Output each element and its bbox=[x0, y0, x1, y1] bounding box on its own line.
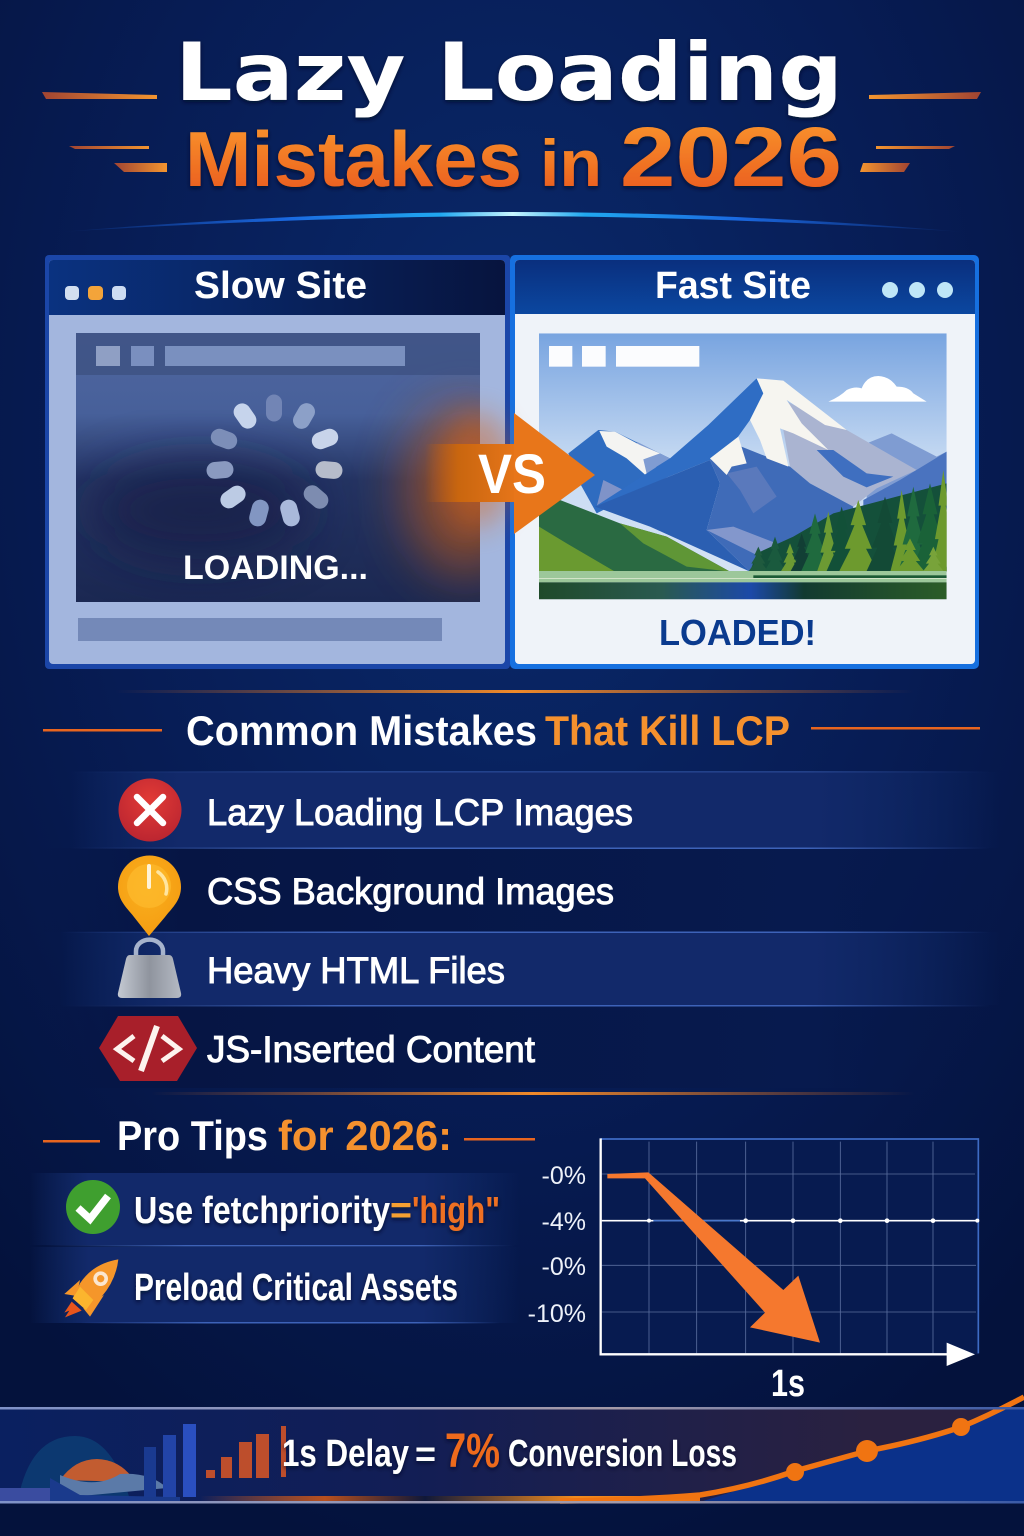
VS text: VS bbox=[478, 442, 546, 505]
decorative landscape bbox=[0, 1436, 180, 1502]
title line: Mistakes in 2026: in bbox=[540, 126, 602, 200]
slow site header bar bbox=[49, 260, 505, 315]
window dots bbox=[65, 286, 126, 300]
tip text 1: 'high" bbox=[412, 1190, 500, 1232]
mistake text 1: Lazy Loading LCP Images bbox=[207, 792, 633, 833]
icon: code hexagon bbox=[99, 1016, 197, 1081]
title line: Mistakes in 2026: 2026 bbox=[620, 110, 842, 204]
window dots bbox=[882, 282, 953, 298]
icon: red cross bbox=[118, 778, 182, 842]
placeholder bar bbox=[78, 618, 442, 641]
fast site header bar bbox=[515, 260, 975, 314]
x axis label: 1s bbox=[771, 1363, 805, 1405]
section heading: pro tips: Pro Tips bbox=[117, 1112, 268, 1159]
VS arrow badge bbox=[425, 412, 595, 534]
axes bbox=[601, 1138, 950, 1354]
y axis labels: -10% bbox=[528, 1300, 586, 1328]
loaded label: LOADED! bbox=[659, 612, 816, 653]
title line: Lazy Loading: Lazy Loading bbox=[175, 26, 843, 119]
mistake text 3: Heavy HTML Files bbox=[207, 950, 505, 991]
icon: green check bbox=[66, 1180, 120, 1234]
title bbox=[175, 26, 843, 204]
mistake text 2: CSS Background Images bbox=[207, 871, 614, 912]
section heading: pro tips bbox=[43, 1112, 535, 1159]
icon: weight bbox=[118, 940, 181, 998]
growth curve bbox=[560, 1397, 1024, 1501]
bottom banner bbox=[0, 1397, 1024, 1504]
chart: conversion drop bbox=[528, 1138, 979, 1405]
heading: Fast Site: Fast Site bbox=[655, 265, 811, 307]
title line: Mistakes in 2026: Mistakes bbox=[185, 115, 522, 203]
loading label: LOADING... bbox=[183, 549, 368, 587]
blurred page preview bbox=[76, 333, 480, 602]
section heading: common mistakes bbox=[43, 707, 980, 754]
icon: yellow timer pin bbox=[118, 856, 181, 936]
orange down arrow bbox=[607, 1172, 820, 1343]
title line: Mistakes in 2026 bbox=[185, 110, 842, 204]
y axis labels: -0% bbox=[542, 1253, 586, 1281]
decorative orange bars bbox=[206, 1426, 286, 1478]
chart plot area bbox=[601, 1138, 979, 1366]
panel: slow site browser bbox=[45, 255, 525, 669]
section heading: common mistakes: That Kill LCP bbox=[545, 707, 790, 754]
tip text 1: Use fetchpriority bbox=[134, 1190, 390, 1232]
banner text: 1s Delay bbox=[282, 1433, 409, 1475]
y axis labels: -0% bbox=[542, 1162, 586, 1190]
heading: Slow Site: Slow Site bbox=[194, 265, 367, 307]
icon: rocket bbox=[64, 1259, 118, 1317]
mistakes list bbox=[40, 771, 1000, 1088]
y axis labels: -4% bbox=[542, 1208, 586, 1236]
pro tips list bbox=[30, 1173, 520, 1324]
section heading: pro tips: for 2026: bbox=[278, 1112, 452, 1159]
section heading: common mistakes: Common Mistakes bbox=[186, 707, 537, 754]
y axis labels bbox=[528, 1162, 586, 1328]
banner text: 7% bbox=[445, 1425, 500, 1478]
banner text: Conversion Loss bbox=[508, 1433, 737, 1475]
tip text 1: = bbox=[390, 1190, 412, 1232]
mistake text 4: JS-Inserted Content bbox=[207, 1029, 536, 1070]
loading spinner bbox=[206, 394, 343, 528]
tip text 2: Preload Critical Assets bbox=[134, 1267, 458, 1309]
decorative blue bars bbox=[144, 1424, 196, 1497]
mountain landscape image bbox=[539, 333, 955, 599]
banner text bbox=[282, 1425, 737, 1478]
panel: fast site browser bbox=[510, 255, 979, 669]
banner text: = bbox=[415, 1433, 436, 1474]
